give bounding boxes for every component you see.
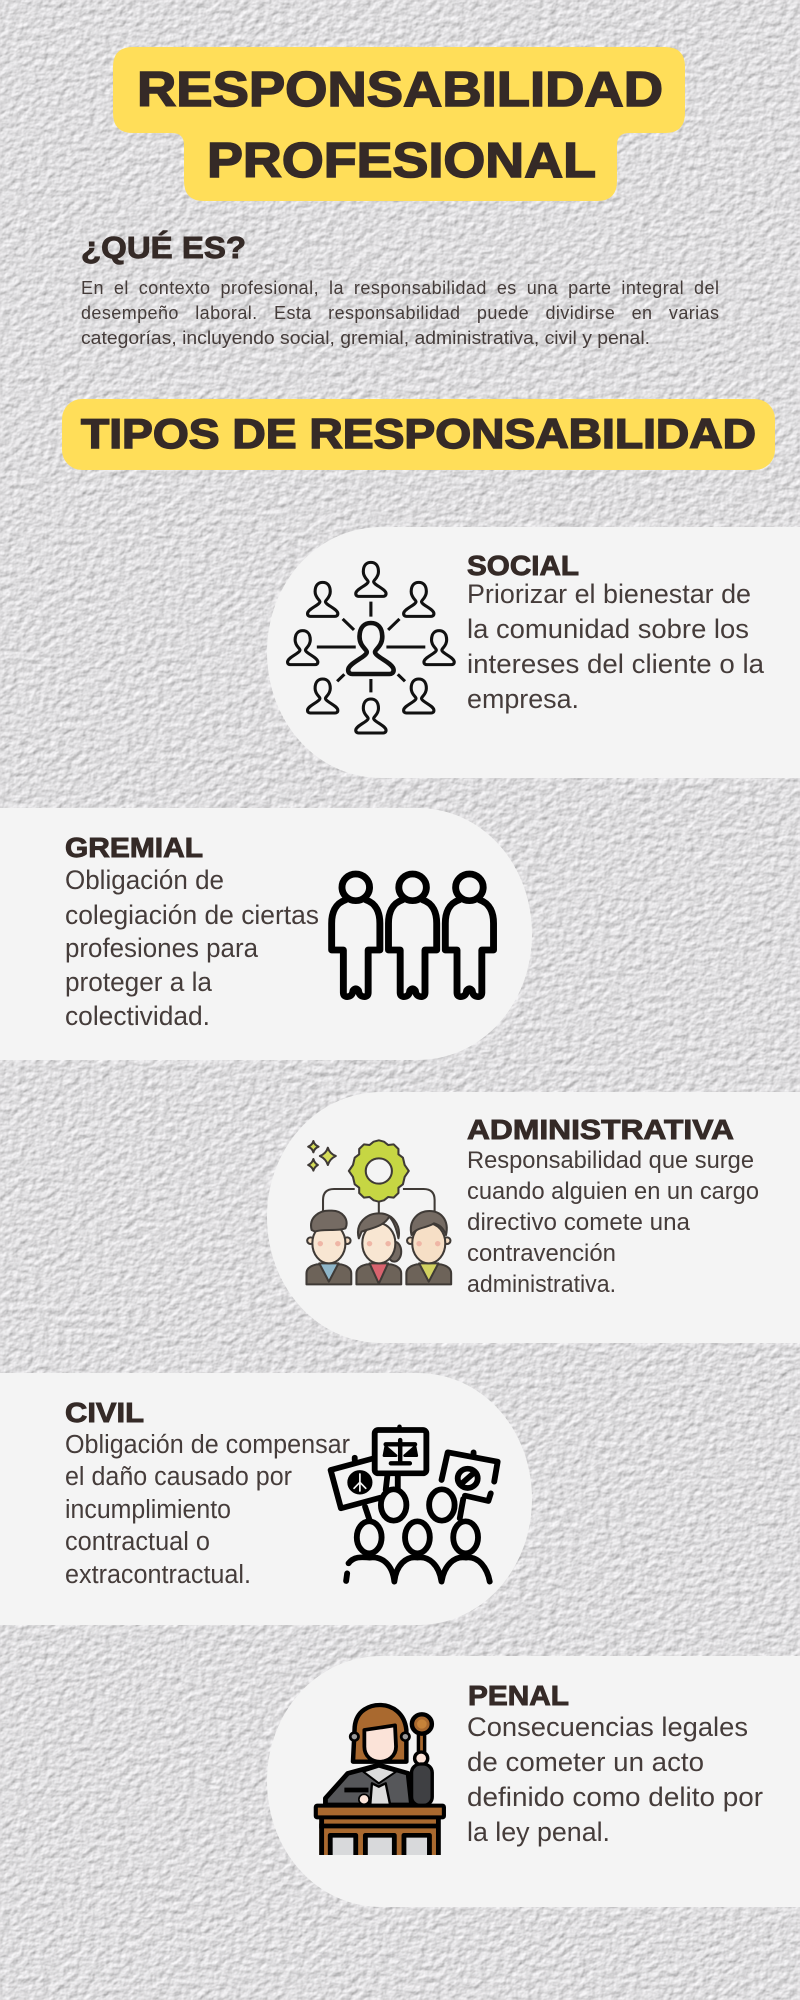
text block: civil: Obligación de compensar: [65, 1431, 350, 1459]
icon: judge with gavel: [316, 1705, 444, 1855]
heading: social: SOCIAL: [467, 550, 579, 581]
text block: civil: [65, 1431, 350, 1589]
heading: tipos de responsabilidad: [62, 399, 775, 470]
person 3: [406, 1211, 451, 1284]
text block: administrativa: cuando alguien en un cargo: [467, 1178, 759, 1205]
text block: gremial: profesiones para: [65, 933, 259, 963]
text block: civil: contractual o: [65, 1528, 210, 1556]
text block: penal: Consecuencias legales: [467, 1712, 748, 1742]
text block: definition: categorías, incluyendo social, gremial, administrativa, civil y penal.: [81, 328, 650, 348]
person 1: [306, 1211, 351, 1284]
heading: qué es: ¿QUÉ ES?: [81, 230, 246, 265]
text block: civil: extracontractual.: [65, 1561, 251, 1589]
panel: gremial: [0, 808, 532, 1060]
text block: penal: [467, 1712, 763, 1847]
text block: social: empresa.: [467, 684, 579, 714]
icon: protest with signs: [331, 1427, 498, 1582]
heading: administrativa: ADMINISTRATIVA: [467, 1114, 734, 1145]
person 2: [356, 1213, 401, 1284]
text block: social: [467, 579, 765, 714]
title: [113, 47, 685, 201]
heading: penal: PENAL: [468, 1680, 569, 1711]
text block: administrativa: administrativa.: [467, 1271, 616, 1298]
icon: gear and team: [306, 1140, 451, 1284]
text block: administrativa: directivo comete una: [467, 1209, 691, 1236]
text block: penal: definido como delito por: [467, 1782, 763, 1812]
text block: gremial: Obligación de: [65, 865, 224, 895]
text block: social: la comunidad sobre los: [467, 614, 749, 644]
text block: gremial: colectividad.: [65, 1001, 210, 1031]
text block: penal: la ley penal.: [467, 1817, 610, 1847]
text block: definition: [81, 278, 719, 348]
text block: definition: En el contexto profesional, la responsabilidad es una parte integral del: [81, 278, 719, 298]
title: RESPONSABILIDAD: [137, 63, 663, 117]
panel: administrativa: [267, 1092, 800, 1343]
icon: three people: [332, 874, 494, 997]
text block: gremial: [65, 865, 319, 1031]
text block: gremial: colegiación de ciertas: [65, 900, 319, 930]
section: qué es: [81, 230, 719, 348]
text block: gremial: proteger a la: [65, 967, 213, 997]
text block: social: Priorizar el bienestar de: [467, 579, 751, 609]
panel: penal: [267, 1656, 800, 1907]
icon: social network of people: [288, 562, 454, 733]
panel: civil: [0, 1373, 532, 1625]
text block: administrativa: contravención: [467, 1240, 616, 1267]
text block: administrativa: Responsabilidad que surge: [467, 1147, 754, 1174]
text block: penal: de cometer un acto: [467, 1747, 704, 1777]
heading: civil: CIVIL: [65, 1397, 144, 1428]
text block: civil: incumplimiento: [65, 1496, 231, 1524]
text block: definition: desempeño laboral. Esta responsabilidad puede dividirse en varias: [81, 303, 719, 323]
text block: social: intereses del cliente o la: [467, 649, 765, 679]
heading: gremial: GREMIAL: [65, 832, 203, 863]
title: PROFESIONAL: [207, 134, 596, 188]
text block: administrativa: [467, 1147, 759, 1298]
panel: social: [267, 527, 800, 778]
heading: tipos de responsabilidad: TIPOS DE RESPONSABILIDAD: [81, 410, 756, 457]
text block: civil: el daño causado por: [65, 1463, 292, 1491]
